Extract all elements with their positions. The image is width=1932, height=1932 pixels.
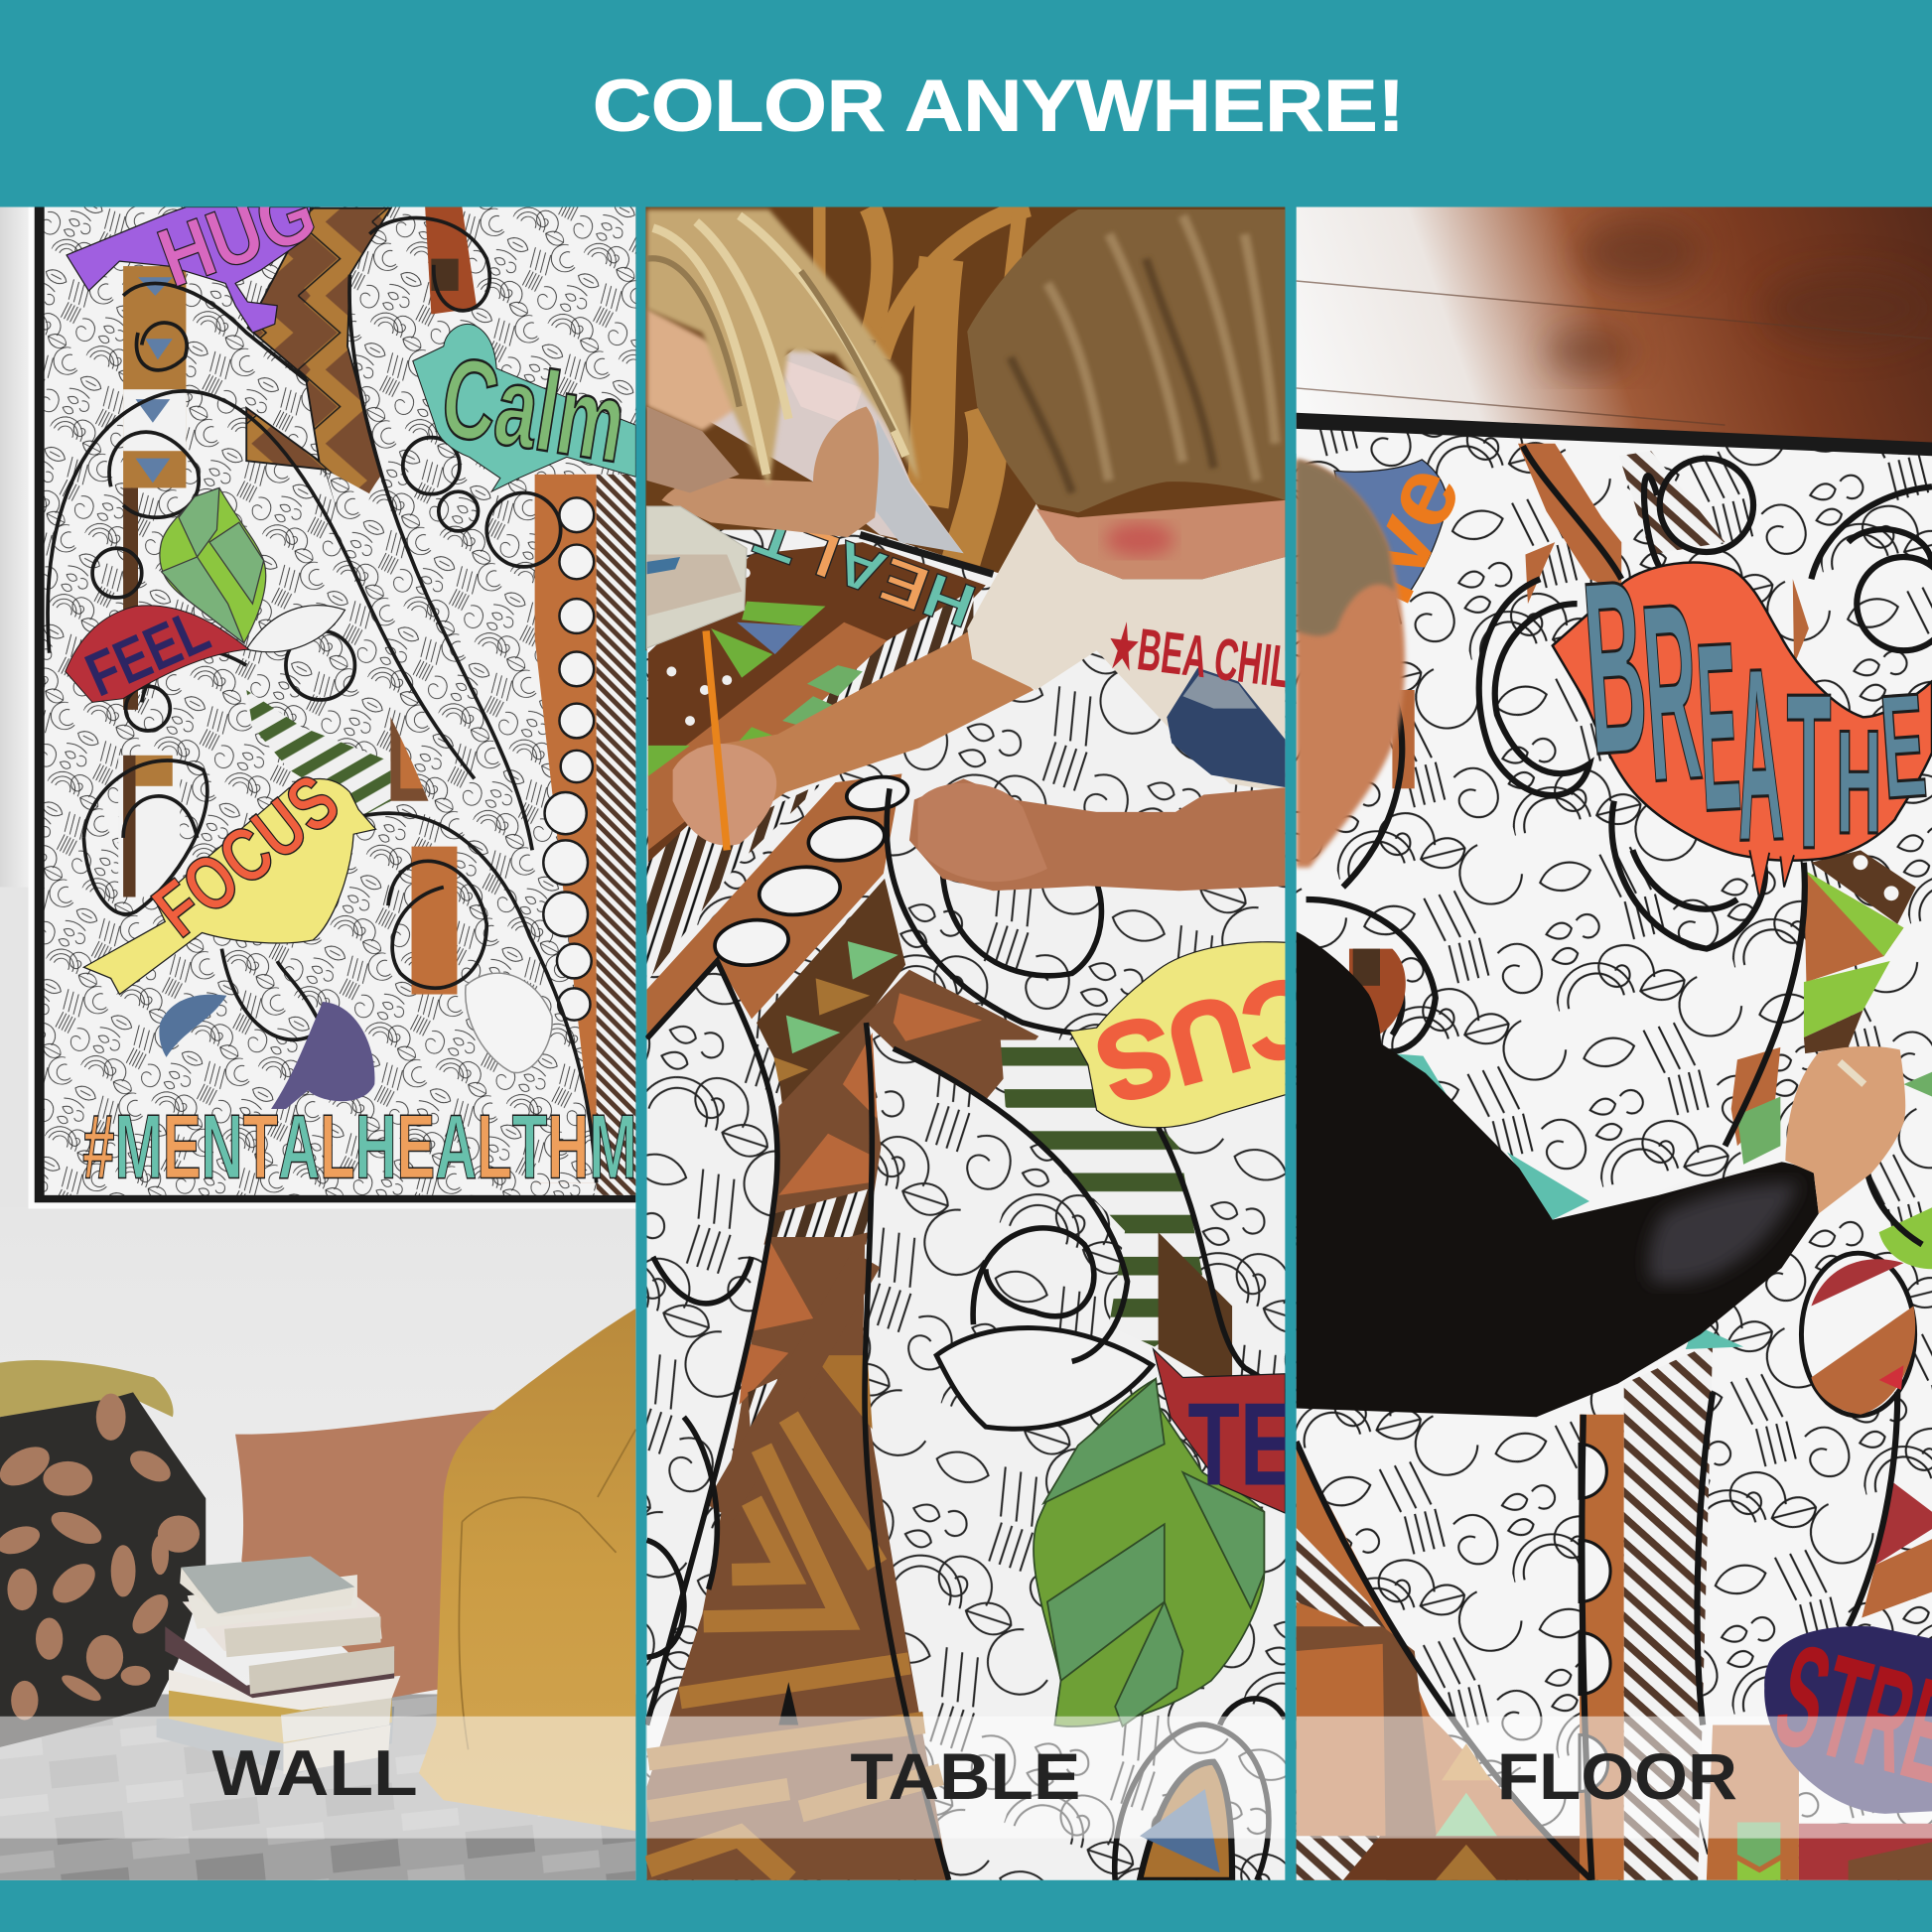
lower brown chevrons bbox=[647, 1237, 949, 1880]
red and orange ball bbox=[1801, 1253, 1915, 1416]
wall background bbox=[0, 207, 635, 1880]
green ball right bbox=[1879, 1207, 1932, 1269]
poster top edge bbox=[1297, 413, 1932, 456]
blanket bbox=[0, 1360, 174, 1417]
label band: wall bbox=[0, 1717, 635, 1839]
right side green chevrons bbox=[1804, 870, 1903, 982]
icon: purple bird HUG: HUG bbox=[147, 163, 328, 306]
orange wheel band bbox=[647, 773, 910, 1039]
blue bird GIVE: Give bbox=[1293, 448, 1482, 688]
floor poster base bbox=[1297, 419, 1932, 1880]
icon: purple bird HUG bbox=[66, 207, 315, 334]
man's hand bbox=[1785, 1046, 1905, 1213]
rug bbox=[0, 1694, 635, 1880]
other arm bbox=[909, 778, 1288, 891]
right orange pieces bbox=[1707, 1725, 1799, 1880]
orange bird BREATHE bbox=[1553, 529, 1932, 899]
icon: teal bird CALM: Calm bbox=[434, 333, 634, 486]
green leaf bbox=[1034, 1379, 1264, 1726]
doodle swirl outlines bbox=[48, 217, 597, 1182]
beanbag seams bbox=[459, 1430, 635, 1749]
red bird fragment: TE bbox=[1187, 1378, 1297, 1510]
table poster base bbox=[647, 530, 1285, 1880]
top arc colour bbox=[425, 207, 477, 314]
label: wall: WALL bbox=[211, 1737, 418, 1809]
wood floor bbox=[1297, 207, 1932, 454]
girl at table bbox=[647, 209, 964, 553]
icon: red bird FEEL bbox=[65, 605, 250, 703]
icon: red bird FEEL: FEEL bbox=[75, 595, 219, 710]
room background bbox=[645, 207, 1285, 650]
brown triangle band bbox=[757, 879, 905, 1128]
orange bird BREATHE: E bbox=[1692, 593, 1745, 863]
orange bird BREATHE: A bbox=[1730, 618, 1787, 894]
crayon box bbox=[647, 506, 747, 648]
boy face bbox=[1036, 500, 1285, 579]
yellow bird SNUG fragment: FOCUS bbox=[1084, 911, 1482, 1127]
orange bird BREATHE: E bbox=[1876, 663, 1931, 830]
floor plank lines bbox=[1297, 281, 1932, 425]
icon: purple curl bbox=[271, 1002, 374, 1109]
bold doodle outlines bbox=[1297, 446, 1932, 1880]
icon: yellow bird FOCUS: FOCUS bbox=[138, 758, 354, 953]
colored poster geometry: top bbox=[648, 498, 986, 899]
boy hair bbox=[967, 209, 1285, 512]
word on table: HEALT bbox=[747, 498, 984, 640]
girl dress bbox=[692, 345, 964, 553]
green stripes bbox=[246, 690, 390, 816]
orange band and stripes bbox=[535, 475, 597, 1182]
stack of books bbox=[157, 1556, 400, 1774]
colored poster geometry: floor bbox=[1297, 444, 1932, 1880]
girl face bbox=[647, 308, 740, 431]
teal bird fragments bbox=[1390, 1053, 1743, 1349]
poster edge bbox=[860, 535, 993, 574]
orange bird BREATHE: T bbox=[1787, 647, 1832, 896]
orange spiral fill bbox=[412, 847, 457, 995]
label band: table bbox=[645, 1717, 1285, 1839]
icon: blue leaf bbox=[159, 995, 226, 1057]
man's black sweater bbox=[1297, 931, 1819, 1417]
patterned bag bbox=[0, 1392, 206, 1747]
diagonal stripes bbox=[1624, 1343, 1713, 1880]
boy arm bbox=[673, 632, 1034, 828]
wooden chairs bbox=[819, 207, 1029, 561]
panel: wall bbox=[0, 163, 637, 1880]
pencil bbox=[706, 630, 727, 850]
lower left structure bbox=[1297, 1442, 1589, 1880]
paisley white shapes bbox=[936, 1328, 1152, 1429]
orange bird BREATHE: B bbox=[1577, 529, 1654, 807]
orange bird BREATHE: R bbox=[1635, 549, 1708, 835]
man's head bbox=[1297, 460, 1405, 868]
shirt lettering: ★BEA CHILL bbox=[1105, 613, 1314, 703]
sweater folds bbox=[1649, 1182, 1799, 1284]
girl hair bbox=[647, 209, 919, 486]
icon: yellow bird FOCUS bbox=[83, 758, 376, 995]
wall poster bbox=[29, 163, 637, 1208]
dolphin print bbox=[1167, 668, 1285, 787]
boy shirt bbox=[967, 504, 1285, 792]
hashtag: #MENTALHEALTHM bbox=[82, 1096, 637, 1197]
inner ball brown fill bbox=[1349, 949, 1406, 1035]
white leaf bbox=[246, 606, 345, 652]
writing hand bbox=[673, 744, 776, 846]
icon: green leaf bbox=[160, 487, 266, 643]
beanbag bbox=[419, 1309, 635, 1831]
red triangle bbox=[1875, 1481, 1932, 1565]
wheels on orange band bbox=[543, 497, 594, 1021]
pillow bbox=[235, 1410, 496, 1698]
central brown beams bbox=[763, 970, 1038, 1257]
label: table: TABLE bbox=[850, 1739, 1080, 1813]
blue triangle block bbox=[1140, 1762, 1232, 1880]
red bird fragment bbox=[1154, 1349, 1297, 1513]
boy at table bbox=[673, 209, 1314, 891]
girl arm bbox=[661, 407, 879, 537]
label band: floor bbox=[1297, 1717, 1932, 1839]
green striped band bbox=[1001, 1039, 1208, 1346]
bold doodle outlines bbox=[647, 788, 1285, 1880]
left brown column bbox=[123, 266, 186, 487]
vertical orange band bbox=[1580, 1415, 1624, 1880]
orange bird BREATHE: H bbox=[1836, 700, 1881, 865]
brown centre chevrons bbox=[245, 207, 392, 520]
panel: floor bbox=[1293, 207, 1932, 1880]
leaf outline doodle bbox=[466, 973, 552, 1073]
panel: table bbox=[645, 207, 1482, 1880]
title: COLOR ANYWHERE! bbox=[593, 66, 1405, 147]
label: floor: FLOOR bbox=[1497, 1739, 1737, 1813]
wood dark patches bbox=[1547, 218, 1932, 373]
